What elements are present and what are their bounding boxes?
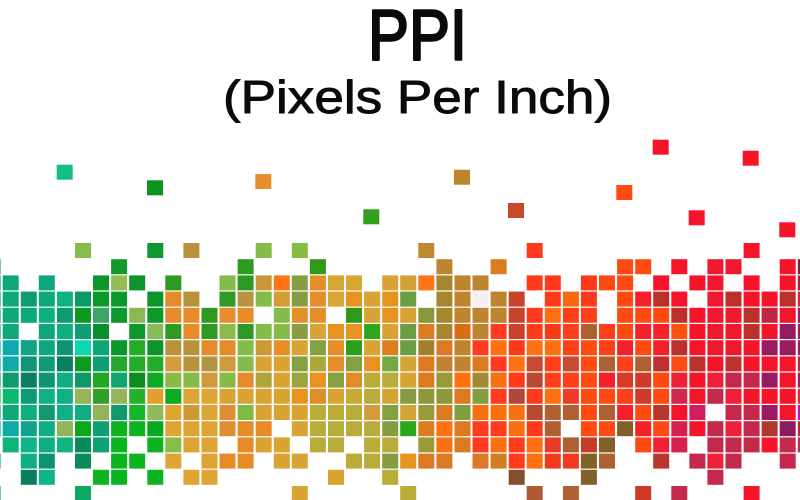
scattered pixels above the grid [57,140,795,237]
subtitle: (Pixels Per Inch) [223,71,612,123]
pixel grid spectrum [0,243,800,500]
